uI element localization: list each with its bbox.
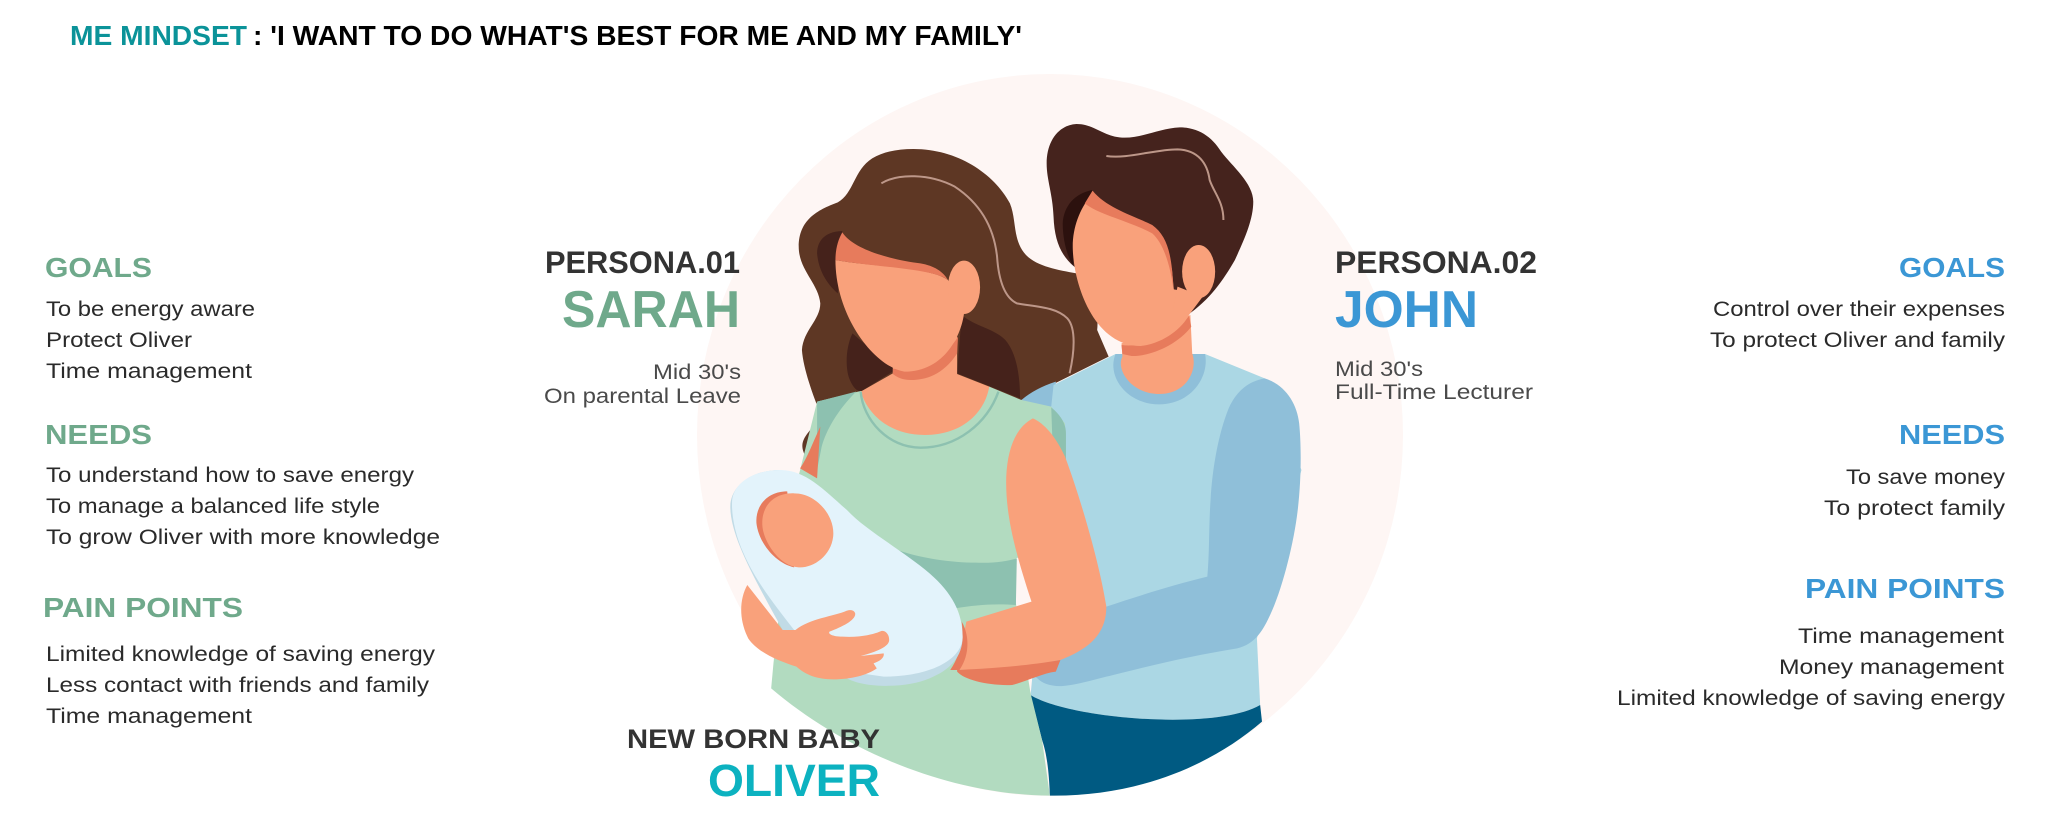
man's trousers (1031, 695, 1262, 796)
John pain points: Limited knowledge of saving energy (1617, 687, 2006, 710)
John needs: To protect family (1824, 497, 2006, 520)
Sarah needs: To grow Oliver with more knowledge (46, 526, 440, 549)
title: ME MINDSET (70, 20, 247, 51)
Sarah pain points (43, 592, 436, 728)
Oliver persona label: OLIVER (708, 755, 880, 806)
title: : 'I WANT TO DO WHAT'S BEST FOR ME AND MY FAMILY' (253, 20, 1022, 51)
Sarah pain points: Time management (46, 705, 252, 728)
John needs (1824, 419, 2006, 520)
John pain points: Money management (1779, 656, 2004, 679)
Oliver persona label (627, 724, 880, 806)
Sarah goals (45, 252, 255, 383)
John persona label: JOHN (1335, 281, 1478, 339)
John pain points: PAIN POINTS (1805, 573, 2005, 604)
man's head (1047, 124, 1253, 404)
Sarah goals: To be energy aware (46, 298, 255, 321)
John goals (1710, 252, 2006, 352)
Sarah needs (45, 419, 440, 549)
Sarah goals: Protect Oliver (46, 329, 192, 352)
Sarah pain points: Less contact with friends and family (46, 674, 430, 697)
woman's hair (799, 149, 1109, 460)
John needs: To save money (1846, 466, 2006, 489)
John persona label: Full-Time Lecturer (1335, 381, 1533, 404)
Sarah persona label: PERSONA.01 (545, 244, 740, 280)
Sarah needs: To understand how to save energy (46, 464, 415, 487)
Sarah persona label: SARAH (562, 281, 740, 339)
Sarah needs: To manage a balanced life style (46, 495, 380, 518)
Sarah goals: Time management (46, 360, 252, 383)
Sarah pain points: Limited knowledge of saving energy (46, 643, 436, 666)
family illustration (730, 124, 1301, 796)
Sarah persona label (544, 244, 741, 408)
Sarah needs: NEEDS (45, 419, 152, 450)
John persona label: PERSONA.02 (1335, 244, 1537, 280)
John goals: GOALS (1899, 252, 2005, 283)
John goals: Control over their expenses (1713, 298, 2005, 321)
woman's head (835, 232, 998, 448)
Sarah's profile (43, 252, 440, 728)
John persona label: Mid 30's (1335, 358, 1423, 381)
woman's arms (800, 418, 1106, 685)
John pain points: Time management (1798, 625, 2004, 648)
man's shirt and sleeve (1021, 354, 1301, 720)
Sarah persona label: Mid 30's (653, 361, 741, 384)
background circle (697, 74, 1403, 796)
Oliver persona label: NEW BORN BABY (627, 724, 880, 754)
John needs: NEEDS (1899, 419, 2005, 450)
John persona label (1335, 244, 1537, 404)
woman's hand (741, 585, 889, 679)
Sarah persona label: On parental Leave (544, 385, 741, 408)
woman's dress (771, 387, 1066, 796)
Sarah goals: GOALS (45, 252, 152, 283)
Sarah pain points: PAIN POINTS (43, 592, 243, 623)
John's profile (1617, 252, 2006, 710)
John pain points (1617, 573, 2006, 710)
John goals: To protect Oliver and family (1710, 329, 2006, 352)
baby in blanket (730, 470, 963, 686)
